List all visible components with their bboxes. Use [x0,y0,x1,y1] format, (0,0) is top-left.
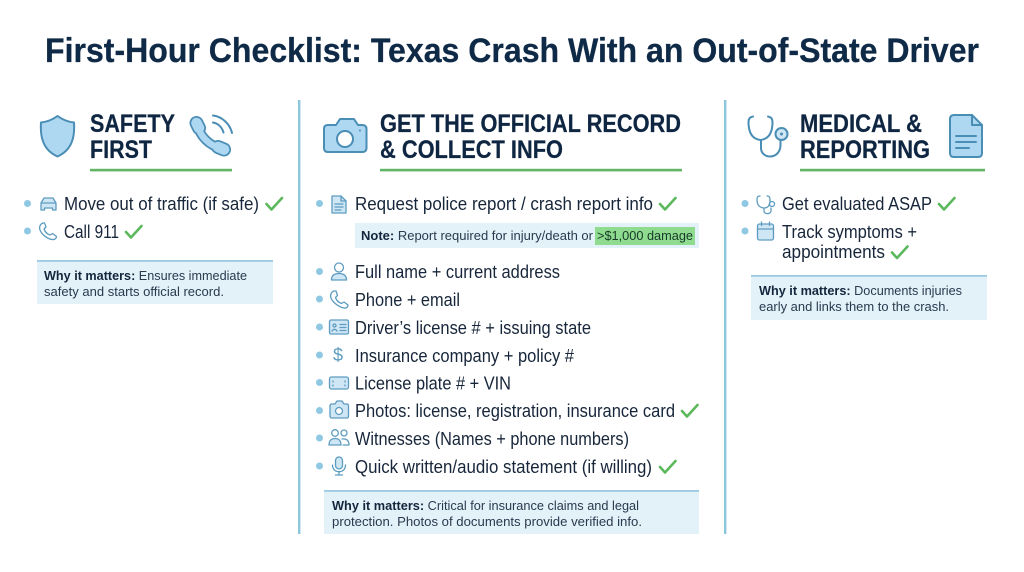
callout: why it matters, record [324,490,699,534]
panel: official record [316,110,699,534]
icon: camera [324,119,366,152]
item: photos: Photos: license, registration, insurance card [355,401,675,421]
callout: why it matters, record: Why it matters: Critical for insurance claims and legal [332,498,639,513]
icon: shield [41,116,74,156]
heading: get the official record: & COLLECT INFO [380,136,563,164]
callout: why it matters, medical: early and links them to the crash. [759,299,949,314]
item: phone and email [316,290,460,310]
note: report requirement: >$1,000 damage [597,228,693,243]
item: full name: Full name + current address [355,262,560,282]
panel: safety first [24,110,282,304]
item: license plate: License plate # + VIN [355,374,511,394]
callout: why it matters, safety: Why it matters: Ensures immediate [44,268,247,283]
item: call 911 [24,222,142,242]
callout: why it matters, medical: Why it matters: Documents injuries [759,283,962,298]
heading: get the official record: GET THE OFFICIAL RECORD [380,110,681,138]
icon: stethoscope [748,116,788,156]
callout: why it matters, medical [751,275,987,320]
item: insurance: $ [333,345,343,365]
callout: why it matters, safety [37,260,273,304]
item: get evaluated: Get evaluated ASAP [782,194,932,214]
item: witnesses: Witnesses (Names + phone numbers) [355,429,629,449]
item: track symptoms: Track symptoms + [782,222,917,242]
heading: medical and reporting: REPORTING [800,136,930,164]
heading: medical and reporting [800,110,930,164]
item: statement: Quick written/audio statement (if willing) [355,457,652,477]
callout: why it matters, record: protection. Photos of documents provide verified info. [332,514,642,529]
item: call 911: Call 911 [64,222,119,242]
item: track symptoms [742,222,917,262]
heading: safety first [90,110,175,164]
title: First-Hour Checklist: Texas Crash With an Out-of-State Driver [45,32,979,70]
heading: medical and reporting: MEDICAL & [800,110,922,138]
callout: why it matters, safety: safety and starts official record. [44,284,224,299]
heading: safety first: FIRST [90,136,152,164]
note: report requirement [355,223,699,248]
item: insurance: Insurance company + policy # [355,346,574,366]
heading: get the official record [380,110,681,164]
note: report requirement: Note: Report required for injury/death or [361,228,594,243]
item: move out of traffic: Move out of traffic (if safe) [64,194,259,214]
heading: safety first: SAFETY [90,110,175,138]
item: drivers license: Driver’s license # + issuing state [355,318,591,338]
item: phone and email: Phone + email [355,290,460,310]
item: track symptoms: appointments [782,242,885,262]
icon: phone with signal [196,116,232,150]
icon: document [950,115,982,157]
item: police report: Request police report / crash report info [355,194,653,214]
panel: medical and reporting [742,110,987,320]
